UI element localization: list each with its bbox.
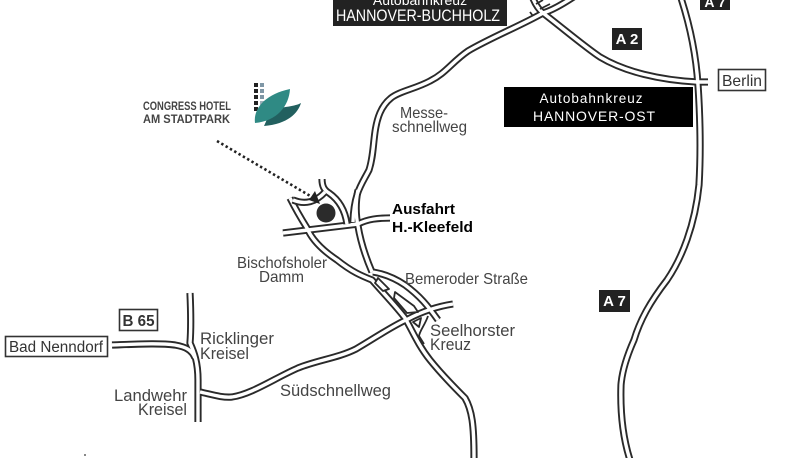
junction label: Ricklinger Kreisel: Ricklinger [200,329,274,348]
logo dot grid [254,83,264,111]
sign: Berlin: Berlin [722,73,762,90]
junction label: Landwehr Kreisel: Landwehr [114,386,187,405]
exit label: Ausfahrt H.-Kleefeld: Ausfahrt [392,202,455,218]
road network [112,0,708,458]
hotel access loop [293,179,347,224]
road casings [112,0,708,458]
road label: Bemeroder Straße: Bemeroder Straße [405,271,528,288]
sign: B 65: B 65 [122,313,155,330]
road fill [112,0,708,458]
junction label: Seelhorster Kreuz: Kreuz [430,335,471,354]
sign: A 7 lower [599,290,630,312]
junction label: Landwehr Kreisel: Kreisel [138,400,187,419]
road label: Messeschnellweg: Messe- [400,105,448,122]
label: Autobahnkreuz Hannover-Ost: Autobahnkreuz [540,91,643,106]
road label: Bischofsholer Damm: Bischofsholer [237,255,328,272]
road label: Messeschnellweg: schnellweg [392,119,467,136]
label: Autobahnkreuz Hannover-Buchholz [333,0,507,26]
sign: A 2: A 2 [616,31,638,48]
exit label: Ausfahrt H.-Kleefeld [392,202,473,236]
label: Autobahnkreuz Hannover-Buchholz: HANNOVER-BUCHHOLZ [336,7,500,25]
label: Autobahnkreuz Hannover-Ost: HANNOVER-OST [533,108,655,124]
dotted arrow to hotel [217,141,320,204]
logo wordmark: CONGRESS HOTEL [143,101,231,113]
sign: A 2 [612,28,642,50]
sign: A 7 lower: A 7 [603,293,626,310]
exit label: Ausfahrt H.-Kleefeld: H.-Kleefeld [392,220,473,236]
junction label: Seelhorster Kreuz: Seelhorster [430,321,515,340]
logo wordmark: AM STADTPARK [143,114,231,126]
sign: Bad Nenndorf: Bad Nenndorf [9,339,104,356]
junction label: Ricklinger Kreisel: Kreisel [200,344,249,363]
label: Autobahnkreuz Hannover-Ost [504,87,693,127]
logo leaves [264,103,301,126]
road label: Südschnellweg: Südschnellweg [280,382,391,400]
road label: Bischofsholer Damm: Damm [259,269,304,286]
hotel location marker [316,204,336,222]
hotel logo [143,83,301,126]
interchange ramps [375,0,550,344]
small mark at lower edge [84,454,86,456]
